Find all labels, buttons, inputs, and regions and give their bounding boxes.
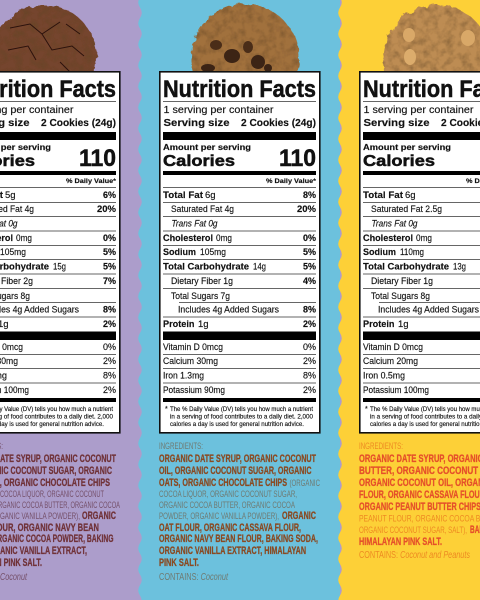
calories: 110 [79, 145, 116, 172]
ingredients [359, 441, 480, 561]
divider rules [363, 102, 480, 383]
calories: Calories [363, 153, 435, 170]
nutrient rows [0, 190, 117, 396]
nutrient rows: 2% [103, 356, 117, 367]
nutrient rows [363, 190, 479, 396]
serving info: Serving size [364, 118, 430, 129]
nutrient rows: 0% [303, 233, 317, 244]
footnote: calories a day is used for general nutrition advice. [170, 421, 304, 428]
footnote: in a serving of food contributes to a daily diet. 2,000 [170, 414, 313, 420]
nutrient rows: Total Carbohydrate [163, 262, 249, 272]
nutrient rows: Total Carbohydrate [363, 262, 449, 272]
panel: chocolate nutrition label and ingredients [0, 72, 120, 583]
nutrient rows: Saturated Fat 4g [171, 204, 234, 215]
ingredients: ORGANIC VANILLA EXTRACT, HIMALAYAN [159, 545, 306, 557]
wavy edge between blue and yellow [330, 0, 370, 600]
nutrient rows: 2% [303, 356, 317, 367]
nutrient rows: 1g [198, 319, 209, 330]
calories: Amount per serving [363, 143, 451, 152]
ingredients: ORGANIC NAVY BEAN FLOUR, BAKING SODA, [159, 533, 318, 545]
nutrient rows: 105mg [200, 247, 226, 258]
thick black bars [363, 132, 480, 402]
nutrient rows: Sodium [363, 247, 396, 258]
nutrient rows: 0mg [16, 233, 32, 244]
ingredients [159, 441, 320, 583]
nutrient rows: 6% [103, 190, 117, 201]
daily value header: % Daily Value* [66, 178, 117, 185]
nutrient rows: 0% [303, 342, 317, 353]
nutrient rows: 5g [5, 190, 16, 201]
nutrient rows: Calcium 20mg [363, 356, 418, 367]
nutrient rows: Protein [363, 319, 395, 330]
nutrient rows: 5% [303, 247, 317, 258]
nutrient rows: 8% [303, 190, 317, 201]
calories: Calories [163, 153, 235, 170]
calories [363, 143, 480, 172]
panel: purple background [0, 0, 140, 600]
nutrient rows: Iron 0.5mg [363, 370, 405, 382]
nutrient rows: 15g [53, 262, 66, 272]
serving info: Serving size [164, 118, 230, 129]
icon: chocolate chip cookie [191, 4, 299, 112]
calories: 110 [279, 145, 316, 172]
calories [163, 143, 316, 172]
footnote [365, 406, 480, 428]
footnote: * [365, 406, 368, 413]
ingredients: CONTAINS: Coconut [159, 572, 229, 583]
calories: Amount per serving [163, 143, 251, 152]
serving info: 1 serving per container [364, 105, 474, 116]
nutrient rows: 7% [103, 276, 117, 287]
ingredients: INGREDIENTS: [359, 441, 403, 451]
nutrient rows: 8% [103, 370, 117, 382]
icon: peanut butter cookie [383, 5, 480, 113]
footnote [165, 406, 313, 428]
nutrient rows: Potassium 90mg [163, 385, 225, 396]
footnote: * [165, 406, 168, 413]
thick black bars [0, 132, 116, 402]
icon: chocolate cookie [0, 5, 97, 111]
nutrient rows: Iron 1.3mg [163, 370, 204, 382]
footnote: The % Daily Value (DV) tells you how much a nutrient [170, 406, 313, 413]
nutrient rows: 2% [303, 319, 317, 330]
title: Nutrition Facts [163, 76, 316, 103]
serving info [364, 105, 480, 129]
serving info: 1 serving per container [164, 105, 274, 116]
ingredients: ORGANIC [282, 510, 316, 522]
nutrient rows: 0% [103, 342, 117, 353]
nutrient rows: 2% [103, 319, 117, 330]
nutrient rows: 8% [103, 304, 117, 316]
divider rules [163, 102, 316, 383]
nutrient rows: Trans Fat 0g [372, 218, 418, 230]
nutrient rows: Calcium 30mg [163, 356, 218, 367]
nutrient rows: 8% [303, 370, 317, 382]
ingredients: ORGANIC [82, 510, 116, 522]
nutrient rows: Trans Fat 0g [172, 218, 218, 230]
serving info: 2 Cookies (24g) [241, 118, 316, 129]
nutrient rows: Sodium [163, 247, 196, 258]
nutrient rows: 20% [97, 204, 117, 215]
nutrition facts box [0, 72, 120, 433]
nutrient rows: 2% [303, 385, 317, 396]
nutrient rows [163, 190, 317, 396]
nutrient rows: 5% [103, 262, 117, 272]
nutrient rows: Cholesterol [363, 233, 413, 244]
nutrient rows: 6g [405, 190, 416, 201]
ingredients: OAT FLOUR, ORGANIC CASSAVA FLOUR, [159, 522, 301, 534]
panel: peanut butter nutrition label and ingredients [359, 72, 480, 561]
ingredients: OATS, ORGANIC CHOCOLATE CHIPS [159, 477, 287, 489]
serving info [0, 105, 116, 129]
nutrient rows: Cholesterol [163, 233, 213, 244]
nutrient rows: 6g [205, 190, 216, 201]
nutrient rows: 13g [453, 262, 466, 272]
ingredients: (ORGANIC [290, 478, 320, 488]
ingredients: COCOA LIQUOR, ORGANIC COCONUT SUGAR, [159, 489, 297, 499]
nutrient rows: 1g [398, 319, 409, 330]
nutrient rows: Total Fat [363, 190, 404, 201]
nutrient rows: 0mg [216, 233, 232, 244]
wavy edge between purple and blue [130, 0, 170, 600]
daily value header: % Daily Value* [266, 178, 317, 185]
ingredients: PINK SALT. [159, 557, 199, 569]
nutrient rows: Dietary Fiber 1g [171, 276, 233, 287]
nutrient rows: 2% [103, 385, 117, 396]
nutrient rows: Potassium 100mg [363, 385, 429, 396]
panel: blue background [150, 0, 340, 600]
nutrient rows: 0mg [416, 233, 432, 244]
ingredients: INGREDIENTS: [159, 441, 203, 451]
ingredients: POWDER, ORGANIC VANILLA POWDER), [159, 511, 279, 521]
footnote [0, 406, 113, 428]
nutrient rows: Total Fat [163, 190, 204, 201]
nutrition facts box [360, 72, 480, 433]
nutrient rows: 5% [103, 247, 117, 258]
nutrient rows: 110mg [400, 247, 424, 258]
ingredients: ORGANIC COCOA BUTTER, ORGANIC COCOA [159, 500, 295, 510]
thick black bars [163, 132, 316, 402]
nutrient rows: 105mg [0, 247, 26, 258]
nutrient rows: Total Sugars 8g [371, 291, 430, 302]
nutrient rows: 20% [297, 204, 317, 215]
nutrient rows: 5% [303, 262, 317, 272]
nutrient rows: Saturated Fat 2.5g [371, 204, 442, 215]
nutrient rows: Dietary Fiber 1g [371, 276, 433, 287]
divider rules [0, 102, 116, 383]
ingredients [0, 441, 120, 583]
nutrient rows: 14g [253, 262, 266, 272]
serving info: 2 Cookies (24g) [41, 118, 116, 129]
nutrient rows: 8% [303, 304, 317, 316]
nutrition facts box [160, 72, 320, 433]
nutrient rows: Vitamin D 0mcg [363, 342, 423, 353]
nutrient rows: Protein [163, 319, 195, 330]
nutrient rows: 0% [103, 233, 117, 244]
serving info [164, 105, 316, 129]
ingredients: OIL, ORGANIC COCONUT SUGAR, ORGANIC [159, 465, 312, 477]
panel: yellow background [350, 0, 480, 600]
nutrient rows: Total Sugars 7g [171, 291, 230, 302]
ingredients: ORGANIC DATE SYRUP, ORGANIC COCONUT [159, 453, 316, 465]
panel: chocolate chip nutrition label and ingredients [159, 72, 320, 583]
calories [0, 143, 116, 172]
nutrient rows: 4% [303, 276, 317, 287]
nutrient rows: Vitamin D 0mcg [163, 342, 223, 353]
nutrient rows: Includes 4g Added Sugars [178, 304, 279, 316]
